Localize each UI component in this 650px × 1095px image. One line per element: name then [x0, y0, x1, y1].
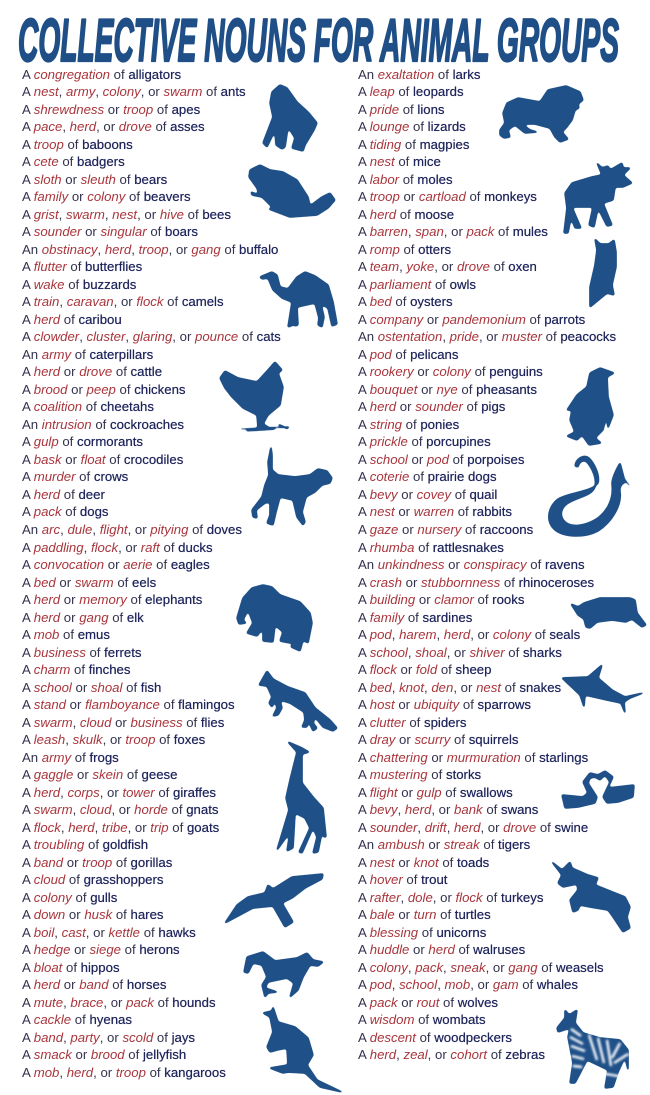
- text block: left column A to K: A train, caravan, or flock of camels: [22, 294, 224, 309]
- text block: left column A to K: A swarm, cloud or business of flies: [22, 715, 224, 730]
- text block: left column A to K: A pack of dogs: [22, 504, 109, 519]
- text block: left column A to K: A school or shoal of fish: [22, 680, 161, 695]
- text block: right column L to Z: [358, 67, 616, 1062]
- text block: left column A to K: A paddling, flock, or raft of ducks: [22, 540, 213, 555]
- text block: right column L to Z: A building or clamor of rooks: [358, 592, 524, 607]
- text block: left column A to K: A convocation or aerie of eagles: [22, 557, 210, 572]
- text block: right column L to Z: A prickle of porcupines: [358, 434, 491, 449]
- text block: left column A to K: A shrewdness or troop of apes: [22, 102, 200, 117]
- text block: right column L to Z: A family of sardines: [358, 610, 472, 625]
- icon: beaver: [249, 165, 335, 217]
- icon: eagle: [225, 874, 323, 927]
- icon: giraffe: [277, 742, 326, 853]
- text block: right column L to Z: A bouquet or nye of pheasants: [358, 382, 537, 397]
- text block: right column L to Z: A pride of lions: [358, 102, 445, 117]
- icon: zebra: [557, 1010, 628, 1088]
- text block: left column A to K: A swarm, cloud, or horde of gnats: [22, 802, 218, 817]
- text block: left column A to K: A business of ferrets: [22, 645, 142, 660]
- text block: right column L to Z: An ostentation, pride, or muster of peacocks: [358, 329, 616, 344]
- icon: camel: [260, 272, 337, 327]
- icon: rhinoceros: [571, 598, 646, 628]
- text block: left column A to K: An army of frogs: [22, 750, 119, 765]
- icon: rattlesnake: [549, 456, 630, 536]
- text block: right column L to Z: A company or pandemonium of parrots: [358, 312, 585, 327]
- text block: left column A to K: A cackle of hyenas: [22, 1012, 132, 1027]
- icon: moose: [564, 163, 632, 233]
- text block: right column L to Z: A crash or stubbornness of rhinoceroses: [358, 575, 594, 590]
- text block: left column A to K: A bloat of hippos: [22, 960, 120, 975]
- text block: left column A to K: A family or colony of beavers: [22, 189, 191, 204]
- text block: right column L to Z: A team, yoke, or drove of oxen: [358, 259, 537, 274]
- icon: shark: [562, 665, 643, 713]
- text block: left column A to K: A charm of finches: [22, 662, 130, 677]
- text block: right column L to Z: A herd or sounder of pigs: [358, 399, 505, 414]
- text block: right column L to Z: A parliament of owls: [358, 277, 476, 292]
- text block: right column L to Z: A labor of moles: [358, 172, 453, 187]
- icon: horse: [244, 952, 323, 997]
- text block: right column L to Z: A host or ubiquity of sparrows: [358, 697, 531, 712]
- text block: right column L to Z: A barren, span, or pack of mules: [358, 224, 548, 239]
- text block: right column L to Z: A pod, school, mob, or gam of whales: [358, 977, 578, 992]
- icon: chicken: [220, 362, 290, 431]
- text block: left column A to K: A coalition of cheetahs: [22, 399, 154, 414]
- text block: left column A to K: A cete of badgers: [22, 154, 125, 169]
- text block: right column L to Z: A bed, knot, den, or nest of snakes: [358, 680, 561, 695]
- text block: left column A to K: A hedge or siege of herons: [22, 942, 180, 957]
- text block: right column L to Z: A colony, pack, sneak, or gang of weasels: [358, 960, 604, 975]
- text block: left column A to K: A nest, army, colony, or swarm of ants: [22, 84, 246, 99]
- text block: left column A to K: A colony of gulls: [22, 890, 117, 905]
- text block: left column A to K: An arc, dule, flight, or pitying of doves: [22, 522, 242, 537]
- text block: left column A to K: A troubling of goldfish: [22, 837, 148, 852]
- text block: right column L to Z: A troop or cartload of monkeys: [358, 189, 537, 204]
- text block: right column L to Z: A wisdom of wombats: [358, 1012, 486, 1027]
- text block: right column L to Z: A romp of otters: [358, 242, 451, 257]
- text block: left column A to K: A mute, brace, or pack of hounds: [22, 995, 216, 1010]
- text block: left column A to K: A herd or memory of elephants: [22, 592, 202, 607]
- text block: left column A to K: An obstinacy, herd, troop, or gang of buffalo: [22, 242, 278, 257]
- icon: owl: [590, 239, 616, 307]
- icon: lion: [500, 86, 583, 142]
- text block: left column A to K: A down or husk of hares: [22, 907, 164, 922]
- text block: left column A to K: A gaggle or skein of geese: [22, 767, 177, 782]
- text block: right column L to Z: A coterie of prairie dogs: [358, 469, 497, 484]
- text block: right column L to Z: A school, shoal, or shiver of sharks: [358, 645, 562, 660]
- icon: dog: [252, 447, 332, 525]
- text block: left column A to K: A boil, cast, or kettle of hawks: [22, 925, 196, 940]
- text block: right column L to Z: A dray or scurry of squirrels: [358, 732, 519, 747]
- text block: left column A to K: A pace, herd, or drove of asses: [22, 119, 205, 134]
- text block: right column L to Z: A chattering or murmuration of starlings: [358, 750, 588, 765]
- text block: left column A to K: A mob of emus: [22, 627, 110, 642]
- text block: left column A to K: A herd or drove of cattle: [22, 364, 162, 379]
- text block: right column L to Z: A bevy or covey of quail: [358, 487, 497, 502]
- text block: right column L to Z: A nest of mice: [358, 154, 441, 169]
- icon: unicorn: [552, 862, 630, 932]
- icon: penguin: [567, 368, 614, 445]
- text block: left column A to K: A brood or peep of chickens: [22, 382, 186, 397]
- text block: left column A to K: A clowder, cluster, glaring, or pounce of cats: [22, 329, 281, 344]
- text block: right column L to Z: A pod, harem, herd, or colony of seals: [358, 627, 580, 642]
- text block: left column A to K: A flock, herd, tribe, or trip of goats: [22, 820, 219, 835]
- text block: right column L to Z: A nest or knot of toads: [358, 855, 489, 870]
- text block: right column L to Z: An ambush or streak of tigers: [358, 837, 530, 852]
- text block: right column L to Z: A bale or turn of turtles: [358, 907, 491, 922]
- icon: gorilla: [263, 85, 317, 151]
- text block: right column L to Z: A string of ponies: [358, 417, 459, 432]
- text block: right column L to Z: A school or pod of porpoises: [358, 452, 524, 467]
- text block: left column A to K: A herd or band of horses: [22, 977, 166, 992]
- text block: left column A to K: A herd or gang of elk: [22, 610, 144, 625]
- text block: left column A to K: A bed or swarm of eels: [22, 575, 156, 590]
- icon: kangaroo: [263, 1007, 342, 1092]
- text block: right column L to Z: A lounge of lizards: [358, 119, 466, 134]
- text block: left column A to K: A wake of buzzards: [22, 277, 136, 292]
- text block: right column L to Z: A sounder, drift, herd, or drove of swine: [358, 820, 588, 835]
- text block: left column A to K: A bask or float of crocodiles: [22, 452, 183, 467]
- text block: left column A to K: An army of caterpillars: [22, 347, 153, 362]
- text block: left column A to K: A congregation of alligators: [22, 67, 181, 82]
- text block: right column L to Z: A rookery or colony of penguins: [358, 364, 543, 379]
- text block: right column L to Z: A gaze or nursery of raccoons: [358, 522, 533, 537]
- text block: left column A to K: A herd of caribou: [22, 312, 122, 327]
- text block: left column A to K: A troop of baboons: [22, 137, 133, 152]
- text block: right column L to Z: A herd, zeal, or cohort of zebras: [358, 1047, 545, 1062]
- text block: left column A to K: A gulp of cormorants: [22, 434, 143, 449]
- text block: left column A to K: A smack or brood of jellyfish: [22, 1047, 186, 1062]
- text block: right column L to Z: A leap of leopards: [358, 84, 464, 99]
- text block: right column L to Z: A rhumba of rattlesnakes: [358, 540, 504, 555]
- text block: left column A to K: [22, 67, 281, 1080]
- icon: fox: [259, 671, 337, 731]
- text block: left column A to K: A herd, corps, or tower of giraffes: [22, 785, 216, 800]
- text block: right column L to Z: A rafter, dole, or flock of turkeys: [358, 890, 543, 905]
- text block: left column A to K: A sloth or sleuth of bears: [22, 172, 167, 187]
- text block: right column L to Z: A descent of woodpeckers: [358, 1030, 512, 1045]
- text block: left column A to K: A murder of crows: [22, 469, 128, 484]
- text block: right column L to Z: A blessing of unicorns: [358, 925, 486, 940]
- text block: right column L to Z: A clutter of spiders: [358, 715, 466, 730]
- text block: right column L to Z: A herd of moose: [358, 207, 454, 222]
- text block: right column L to Z: An unkindness or conspiracy of ravens: [358, 557, 585, 572]
- text block: left column A to K: A sounder or singular of boars: [22, 224, 198, 239]
- text block: right column L to Z: A flight or gulp of swallows: [358, 785, 513, 800]
- text block: right column L to Z: A tiding of magpies: [358, 137, 469, 152]
- text block: left column A to K: A grist, swarm, nest, or hive of bees: [22, 207, 231, 222]
- icon: elephant: [237, 585, 312, 651]
- text block: left column A to K: A mob, herd, or troop of kangaroos: [22, 1065, 226, 1080]
- text block: right column L to Z: A hover of trout: [358, 872, 447, 887]
- text block: right column L to Z: A pod of pelicans: [358, 347, 458, 362]
- text block: left column A to K: A band or troop of gorillas: [22, 855, 172, 870]
- text block: right column L to Z: A pack or rout of wolves: [358, 995, 498, 1010]
- text block: left column A to K: A band, party, or scold of jays: [22, 1030, 195, 1045]
- text block: left column A to K: An intrusion of cockroaches: [22, 417, 184, 432]
- text block: right column L to Z: A huddle or herd of walruses: [358, 942, 525, 957]
- text block: right column L to Z: An exaltation of larks: [358, 67, 480, 82]
- icon: swans: [562, 771, 634, 808]
- text block: right column L to Z: A nest or warren of rabbits: [358, 504, 512, 519]
- text block: left column A to K: A cloud of grasshoppers: [22, 872, 164, 887]
- text block: right column L to Z: A mustering of storks: [358, 767, 481, 782]
- text block: left column A to K: A herd of deer: [22, 487, 105, 502]
- text block: left column A to K: A stand or flamboyance of flamingos: [22, 697, 235, 712]
- text block: left column A to K: A leash, skulk, or troop of foxes: [22, 732, 205, 747]
- text block: left column A to K: A flutter of butterflies: [22, 259, 142, 274]
- text block: right column L to Z: A flock or fold of sheep: [358, 662, 491, 677]
- text block: right column L to Z: A bevy, herd, or bank of swans: [358, 802, 538, 817]
- text block: right column L to Z: A bed of oysters: [358, 294, 453, 309]
